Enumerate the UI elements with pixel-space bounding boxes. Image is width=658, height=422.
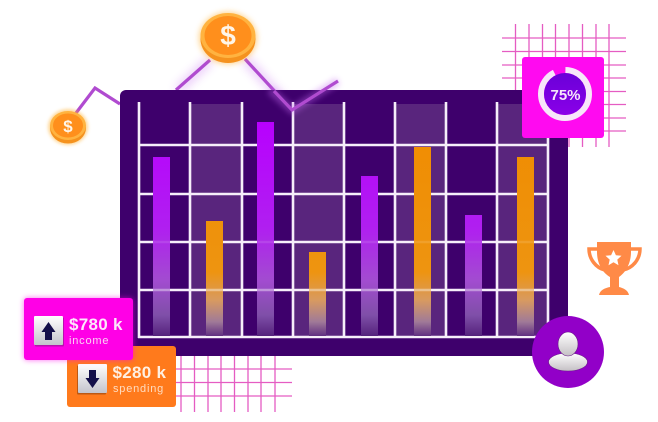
trophy star (606, 250, 622, 265)
icon: small dollar coin: $ (63, 117, 73, 136)
bar 4 orange (309, 252, 326, 336)
user head (558, 332, 578, 356)
icon: large dollar coin (199, 12, 257, 64)
bar 1 purple (153, 157, 170, 336)
bar 6 orange (414, 147, 431, 336)
bar 8 orange (517, 157, 534, 336)
trend line over panel (270, 81, 338, 110)
bar chart (153, 122, 534, 336)
spending value: $280 k (112, 363, 167, 382)
percentage: 75% (550, 87, 581, 104)
chart grid lines (138, 102, 549, 338)
pink grid: bottom (170, 352, 292, 412)
ring centre (544, 73, 586, 115)
icon: trophy (589, 242, 640, 295)
bar 7 purple (465, 215, 482, 336)
bar 2 orange (206, 221, 223, 336)
pink grid: top right (502, 24, 626, 147)
spending label: spending (113, 383, 164, 395)
trend line behind panel (76, 59, 292, 113)
grid lines showing through the faded bars (153, 242, 534, 290)
bar 5 purple (361, 176, 378, 336)
panel: chart background (120, 90, 568, 356)
panel: 75% progress card (522, 57, 604, 138)
icon: small dollar coin (48, 109, 88, 145)
icon: up arrow button (34, 316, 64, 346)
progress ring (541, 70, 589, 118)
icon: user badge (532, 316, 604, 388)
chart shaded columns (191, 104, 548, 337)
trophy handles (589, 249, 640, 270)
income label: income (69, 335, 109, 347)
card: income (24, 298, 133, 360)
income value: $780 k (69, 315, 123, 334)
icon: down arrow button (77, 364, 107, 394)
card: spending (67, 346, 176, 407)
user shoulders (548, 353, 588, 371)
trophy cup and base (597, 242, 631, 295)
icon: large dollar coin: $ (220, 20, 236, 51)
bar 3 purple (257, 122, 274, 336)
